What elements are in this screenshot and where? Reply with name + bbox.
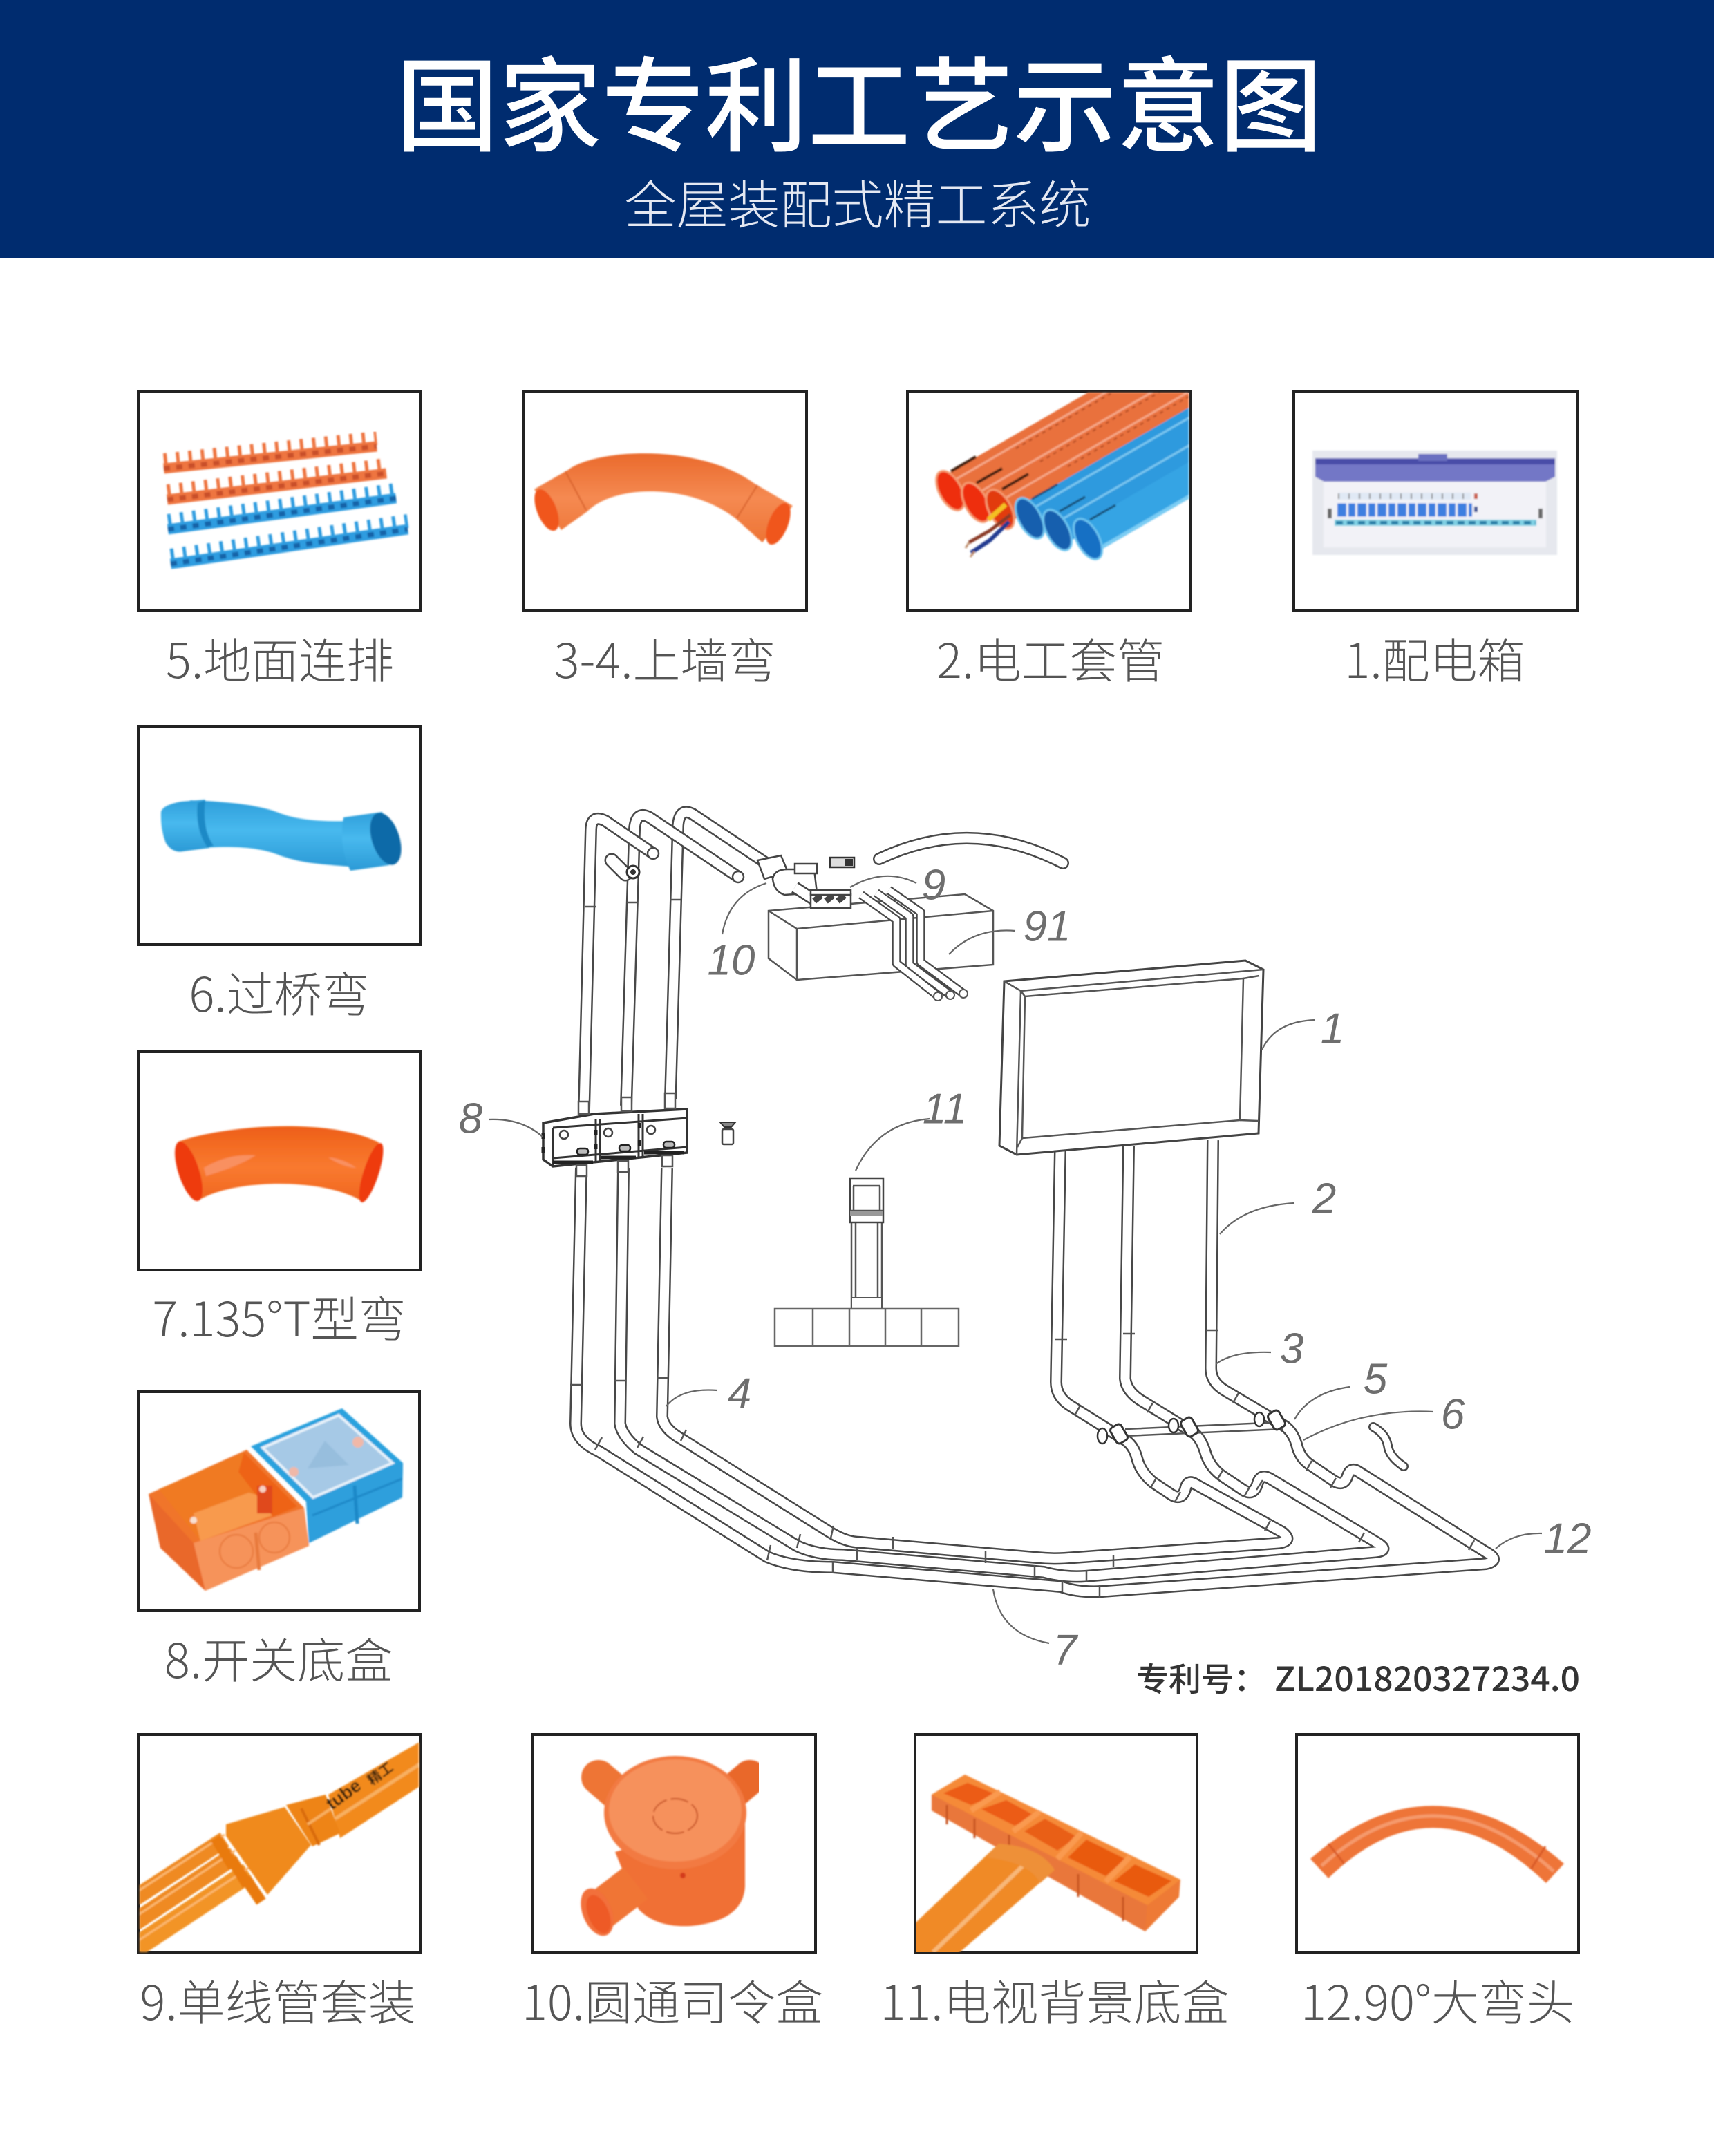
panel: 5 floor connector strips [138,392,420,692]
caption: 6.过桥弯 [189,956,370,1025]
small coupling [830,858,854,867]
caption: 9.单线管套装 [140,1965,416,2034]
small screw [720,1122,735,1144]
caption: 11.电视背景底盒 [880,1965,1230,2034]
part numbers: 7 [1053,1627,1079,1674]
curved loose bend [879,838,1063,863]
panel: 1 distribution box [1294,392,1577,692]
pipe run B [620,815,1383,1576]
panel: 2 electrical conduit [907,319,1372,692]
caption: 10.圆通司令盒 [522,1965,823,2034]
caption: 1.配电箱 [1344,623,1525,692]
three conduits 9 and 91 [811,890,968,1001]
pipe run A [576,819,1494,1591]
tube end stub with screw [612,860,639,878]
subtitle: 全屋装配式精工系统 [624,163,1091,239]
panel: 12 large 90 degree elbow [1297,1734,1579,2034]
patent number [1136,1652,1580,1701]
panel: 3-4 wall bend [524,392,807,692]
panel: 9 single conduit kit: tube [322,1775,365,1814]
caption: 12.90°大弯头 [1301,1965,1574,2034]
distribution box frame 1 [999,961,1263,1155]
patent number: 专利号： [1136,1653,1266,1701]
panel: 6 bridge bend [138,726,420,1025]
panel: 10 round junction box [522,1734,823,2034]
panel: 7 135 degree T bend [138,1052,420,1350]
part numbers: 6 [1441,1390,1465,1439]
part numbers: 8 [459,1095,483,1143]
panel: 9 single conduit kit: 精工 [362,1757,397,1789]
title: 国家专利工艺示意图 [395,23,1323,173]
part numbers: 5 [1364,1356,1388,1403]
part numbers: 10 [708,937,755,984]
caption: 3-4.上墙弯 [554,623,776,692]
pipe run C (upper left to 12) [662,812,1287,1558]
part numbers: 12 [1544,1515,1591,1563]
TV back box and conduit 11 [775,1178,959,1346]
part numbers: 1 [1321,1005,1344,1053]
caption: 2.电工套管 [936,623,1165,692]
part numbers: 9 [922,861,945,909]
pipe joints [570,900,1474,1598]
switch box row [543,1093,687,1176]
patent number: ZL201820327234.0 [1274,1652,1580,1701]
part numbers: 3 [1280,1325,1303,1372]
patent drawing [459,812,1591,1674]
part numbers: 4 [728,1370,751,1418]
part numbers: 91 [1024,902,1071,951]
caption: 7.135°T型弯 [152,1281,406,1350]
part numbers [459,861,1591,1674]
part numbers: 2 [1312,1175,1336,1223]
part numbers: 11 [923,1085,967,1133]
ceiling box [769,894,993,980]
caption: 8.开关底盒 [164,1623,393,1692]
leader lines [489,876,1542,1643]
clips and floor rod [1098,1409,1286,1445]
panel: 11 TV background base box [880,1734,1230,2034]
junction connector 10 [757,855,817,900]
header banner [0,0,1714,258]
panel: 9 single conduit kit [117,1734,423,2034]
caption: 5.地面连排 [166,623,394,692]
loose bridge bend part [1373,1427,1404,1466]
panel: 8 switch boxes [138,1392,420,1692]
